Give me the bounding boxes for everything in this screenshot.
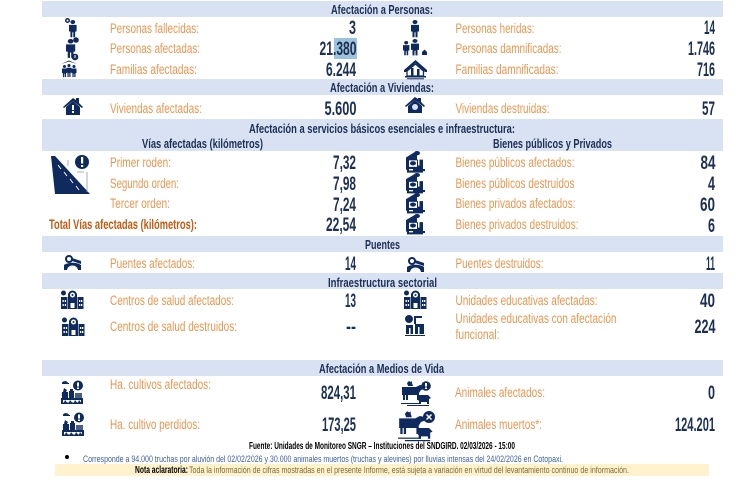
value: 40: 40 (700, 291, 715, 312)
icon: vivienda afectada (63, 98, 83, 115)
icon: bien público destruido (406, 173, 425, 193)
label: unidades educativas con afectación funcional: Unidades educativas con afectación (456, 311, 616, 326)
value: 60: 60 (700, 195, 715, 216)
label: tercer orden: Tercer orden: (110, 196, 170, 211)
label: familias afectadas: Familias afectadas: (110, 62, 197, 77)
footnote: Corresponde a 94.000 truchas por aluvión del 02/02/2026 y 30.000 animales muertos (truchas y alevines) por lluvias intensas del 24/02/2026 en Cotopaxi. (83, 454, 563, 465)
value: 7,98: 7,98 (333, 174, 356, 195)
label: viviendas afectadas: Viviendas afectadas: (110, 101, 202, 116)
icon: familia afectada (61, 60, 77, 77)
value: 6.244: 6.244 (326, 60, 356, 81)
value: 716: 716 (697, 60, 715, 81)
heading: infraestructura sectorial: Infraestructura sectorial (328, 275, 437, 290)
label: bienes privados destruidos: Bienes privados destruidos: (456, 217, 578, 232)
icon: cultivos perdidos (62, 412, 84, 436)
value: 224: 224 (694, 317, 716, 338)
icon: personas damnificadas (403, 39, 427, 55)
label: animales muertos: Animales muertos*: (455, 417, 542, 432)
label: bienes públicos afectados: Bienes públicos afectados: (456, 155, 574, 170)
value: 173,25: 173,25 (322, 415, 356, 436)
heading: bienes públicos y privados: Bienes públicos y Privados (493, 136, 612, 151)
panel: puentes (64, 237, 715, 275)
icon: vivienda destruida (405, 97, 425, 113)
label: unidades educativas afectadas: Unidades educativas afectadas: (456, 293, 598, 308)
label: animales afectados: Animales afectados: (455, 385, 545, 400)
value: 14: 14 (345, 254, 356, 275)
panel: servicios básicos e infraestructura (49, 121, 716, 237)
icon: persona herida (411, 20, 419, 37)
label: familias damnificadas: Familias damnificadas: (456, 62, 558, 77)
footnote bullet (65, 455, 69, 459)
heading: personas: Afectación a Personas: (331, 2, 433, 17)
value: sin dato: -- (346, 317, 356, 338)
label: puentes destruidos: Puentes destruidos: (456, 256, 544, 271)
value: 4: 4 (708, 174, 715, 195)
icon: centro de salud destruido (62, 318, 84, 336)
heading: vías afectadas: Vías afectadas (kilómetros) (142, 136, 263, 151)
label: total vías afectadas: Total Vías afectadas (kilómetros): (49, 217, 197, 232)
value: 22,54: 22,54 (326, 215, 356, 236)
label: personas fallecidas: Personas fallecidas: (110, 21, 199, 36)
label: personas heridas: Personas heridas: (456, 21, 534, 36)
label: unidades educativas con afectación funcional (456, 311, 616, 342)
panel: medios de vida (61, 361, 715, 441)
value: 7,24: 7,24 (333, 195, 356, 216)
label: puentes afectados: Puentes afectados: (110, 256, 195, 271)
icon: animales muertos (398, 411, 435, 441)
label: unidades educativas con afectación funcional: funcional: (456, 327, 500, 342)
label: centros de salud afectados: Centros de salud afectados: (110, 293, 234, 308)
heading: servicios básicos: Afectación a servicios básicos esenciales e infraestructura: (249, 121, 515, 136)
heading: medios de vida: Afectación a Medios de Vida (319, 361, 445, 376)
panel: afectación a viviendas (63, 80, 715, 120)
label: cultivo perdidos: Ha. cultivo perdidos: (110, 417, 200, 432)
label: viviendas destruidas: Viviendas destruidas: (456, 101, 550, 116)
icon: cultivos afectados (61, 380, 83, 404)
value: 5.600: 5.600 (324, 99, 356, 120)
label: primer roden: Primer roden: (110, 155, 171, 170)
label: personas damnificadas: Personas damnificadas: (456, 41, 562, 56)
icon: puente afectado (64, 255, 81, 270)
icon: vía afectada (51, 155, 90, 194)
value: 0: 0 (708, 383, 715, 404)
heading: viviendas: Afectación a Viviendas: (330, 80, 434, 95)
value: 824,31: 824,31 (321, 383, 356, 404)
value: 14: 14 (704, 18, 715, 39)
icon: bien privado afectado (406, 193, 425, 213)
value: 1.746: 1.746 (688, 39, 715, 60)
icon: persona afectada (66, 37, 79, 60)
label: bienes privados afectados: Bienes privados afectados: (456, 196, 576, 211)
icon: puente destruido (407, 257, 424, 272)
label: bienes públicos destruidos: Bienes públicos destruidos (456, 176, 575, 191)
value: 6: 6 (708, 216, 715, 237)
label: segundo orden: Segundo orden: (110, 176, 179, 191)
icon: persona fallecida (65, 18, 77, 37)
icon: familia damnificada (404, 60, 427, 79)
note label: Nota aclaratoria: (135, 465, 188, 476)
value: 3: 3 (349, 18, 356, 39)
panel: infraestructura sectorial (61, 275, 716, 342)
text: 11 (706, 254, 715, 275)
icon: bien público afectado (406, 151, 425, 173)
value: 57: 57 (702, 99, 715, 120)
icon: animales afectados (401, 381, 431, 406)
icon: centro de salud afectado (61, 290, 84, 309)
icon: unidad educativa afectada (404, 290, 426, 309)
value: 13: 13 (345, 291, 356, 312)
label: cultivos afectados: Ha. cultivos afectados: (110, 377, 211, 392)
icon: bien privado destruido (406, 214, 425, 234)
value: 7,32: 7,32 (333, 153, 356, 174)
value: 84: 84 (700, 153, 716, 174)
label: personas afectadas: Personas afectadas: (110, 41, 200, 56)
source line: Fuente: Unidades de Monitoreo SNGR – Instituciones del SNDGIRD. 02/03/2026 - 15:00 (249, 441, 515, 452)
heading: puentes: Puentes (365, 237, 400, 252)
icon: unidad educativa con afectación funcional (405, 315, 425, 336)
value: 124.201: 124.201 (675, 415, 715, 436)
panel: afectación a personas (61, 2, 715, 81)
value: 21.380: 21.380 (320, 39, 356, 60)
label: centros de salud destruidos: Centros de salud destruidos: (110, 319, 237, 334)
